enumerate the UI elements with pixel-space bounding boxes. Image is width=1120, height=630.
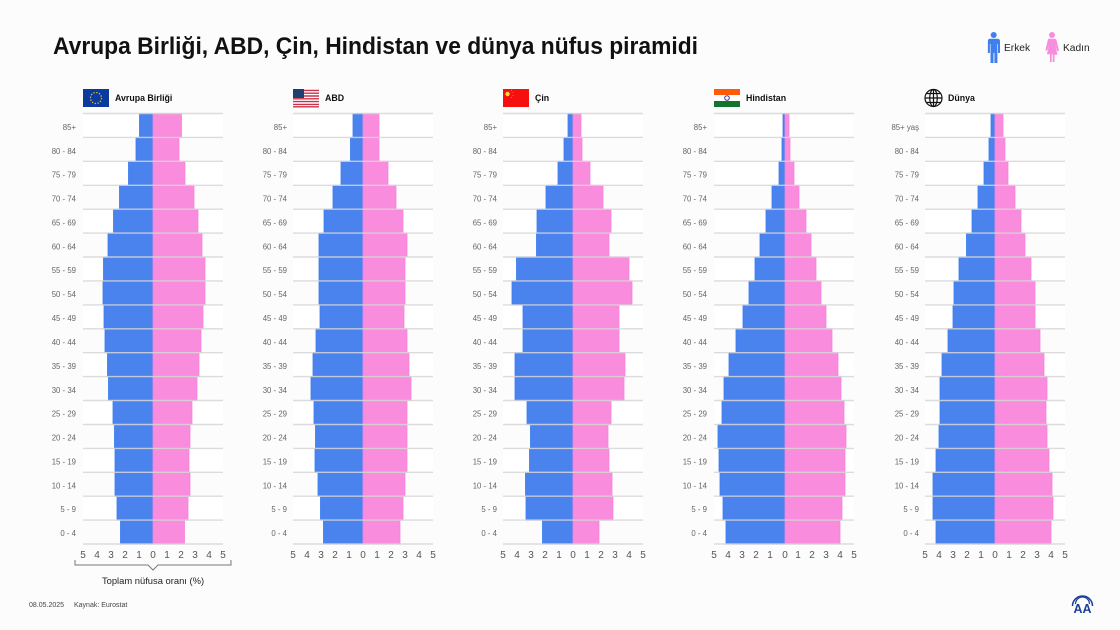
icon: EU flag bbox=[83, 89, 109, 107]
x axis ticks: 1 bbox=[346, 550, 352, 561]
x axis ticks bbox=[290, 550, 436, 561]
age labels: 15 - 19 bbox=[895, 458, 919, 466]
age labels: 0 - 4 bbox=[903, 529, 920, 538]
icon: man bbox=[988, 32, 1000, 63]
age labels: 30 - 34 bbox=[683, 386, 708, 395]
footer: date and source: Kaynak: Eurostat bbox=[74, 602, 127, 609]
row bands bbox=[293, 114, 433, 520]
age labels: 65 - 69 bbox=[263, 218, 287, 228]
female bars bbox=[573, 114, 632, 544]
age labels: 85+ yaş bbox=[891, 123, 919, 132]
age labels: 65 - 69 bbox=[473, 218, 497, 228]
icon: AA logo bbox=[1072, 596, 1092, 616]
age labels: 75 - 79 bbox=[473, 170, 497, 180]
age labels: 0 - 4 bbox=[271, 529, 288, 538]
x axis ticks: 4 bbox=[837, 550, 843, 561]
female bars bbox=[995, 114, 1053, 544]
age labels: 10 - 14 bbox=[52, 482, 77, 490]
age labels: 80 - 84 bbox=[52, 147, 77, 156]
age labels: 75 - 79 bbox=[263, 170, 287, 180]
icon: China flag bbox=[503, 89, 529, 107]
icon: US flag bbox=[293, 89, 319, 107]
age labels: 5 - 9 bbox=[60, 505, 76, 514]
x axis ticks: 2 bbox=[964, 550, 970, 561]
x axis ticks: 5 bbox=[500, 550, 506, 561]
x axis ticks: 2 bbox=[809, 550, 815, 561]
x axis ticks: 0 bbox=[150, 550, 156, 561]
x axis ticks: 4 bbox=[206, 550, 212, 561]
x axis ticks: 3 bbox=[528, 550, 534, 561]
age labels: 75 - 79 bbox=[52, 170, 76, 180]
age labels: 25 - 29 bbox=[473, 410, 497, 418]
x axis ticks: 2 bbox=[598, 550, 604, 561]
age labels: 35 - 39 bbox=[52, 362, 76, 371]
age labels: 70 - 74 bbox=[263, 194, 288, 204]
age labels: 10 - 14 bbox=[473, 482, 498, 490]
x axis ticks: 5 bbox=[430, 550, 436, 561]
x axis ticks: 5 bbox=[640, 550, 646, 561]
female bars bbox=[785, 114, 846, 544]
x axis ticks: 2 bbox=[1020, 550, 1026, 561]
heading: ABD bbox=[325, 93, 344, 103]
age labels bbox=[891, 123, 920, 538]
icon: woman bbox=[1045, 32, 1059, 62]
footer: date and source: 08.05.2025 bbox=[29, 602, 64, 609]
male bars bbox=[311, 114, 363, 544]
male bars bbox=[512, 114, 573, 544]
x axis ticks: 5 bbox=[290, 550, 296, 561]
x axis ticks: 1 bbox=[767, 550, 773, 561]
age labels: 50 - 54 bbox=[683, 290, 708, 299]
age labels: 75 - 79 bbox=[895, 170, 919, 180]
x axis ticks: 0 bbox=[782, 550, 788, 561]
legend bbox=[988, 32, 1090, 63]
age labels: 85+ bbox=[274, 123, 287, 132]
age labels: 65 - 69 bbox=[895, 218, 919, 228]
x axis ticks: 3 bbox=[950, 550, 956, 561]
x axis ticks: 1 bbox=[978, 550, 984, 561]
x axis ticks: 0 bbox=[360, 550, 366, 561]
age labels: 35 - 39 bbox=[895, 362, 919, 371]
age labels: 15 - 19 bbox=[683, 458, 707, 466]
age labels: 35 - 39 bbox=[263, 362, 287, 371]
x axis ticks: 1 bbox=[164, 550, 170, 561]
x axis ticks: 2 bbox=[542, 550, 548, 561]
heading: Avrupa Birliği bbox=[115, 93, 172, 103]
age labels: 65 - 69 bbox=[683, 218, 707, 228]
age labels: 45 - 49 bbox=[473, 314, 497, 323]
x axis ticks: 2 bbox=[753, 550, 759, 561]
age labels: 20 - 24 bbox=[263, 434, 288, 442]
x axis ticks: 2 bbox=[178, 550, 184, 561]
age labels: 5 - 9 bbox=[691, 505, 707, 514]
age labels: 20 - 24 bbox=[895, 434, 920, 442]
age labels: 55 - 59 bbox=[52, 266, 76, 275]
x axis ticks: 4 bbox=[936, 550, 942, 561]
age labels: 55 - 59 bbox=[683, 266, 707, 275]
panel: Çin bbox=[473, 89, 646, 561]
panel: Avrupa Birliği bbox=[52, 89, 231, 586]
age labels: 50 - 54 bbox=[263, 290, 288, 299]
row bands bbox=[503, 114, 643, 520]
age labels bbox=[683, 123, 708, 538]
footer: date and source bbox=[29, 602, 127, 609]
panel: ABD bbox=[263, 89, 436, 561]
heading: Çin bbox=[535, 93, 549, 103]
age labels: 60 - 64 bbox=[473, 242, 498, 252]
x axis ticks: 4 bbox=[304, 550, 310, 561]
x axis ticks: 5 bbox=[922, 550, 928, 561]
age labels: 0 - 4 bbox=[691, 529, 708, 538]
male bars bbox=[103, 114, 153, 544]
axis title: Toplam nüfusa oranı (%) bbox=[102, 575, 204, 586]
age labels: 45 - 49 bbox=[683, 314, 707, 323]
age labels: 10 - 14 bbox=[895, 482, 920, 490]
age labels: 70 - 74 bbox=[52, 194, 77, 204]
age labels: 25 - 29 bbox=[263, 410, 287, 418]
age labels: 20 - 24 bbox=[683, 434, 708, 442]
age labels bbox=[52, 123, 77, 538]
age labels: 60 - 64 bbox=[263, 242, 288, 252]
age labels: 0 - 4 bbox=[60, 529, 77, 538]
x axis ticks: 5 bbox=[1062, 550, 1068, 561]
x axis ticks: 1 bbox=[584, 550, 590, 561]
x axis ticks bbox=[922, 550, 1068, 561]
x axis ticks: 3 bbox=[1034, 550, 1040, 561]
age labels: 45 - 49 bbox=[263, 314, 287, 323]
age labels: 15 - 19 bbox=[473, 458, 497, 466]
icon: India flag bbox=[714, 89, 740, 107]
age labels: 30 - 34 bbox=[263, 386, 288, 395]
x axis ticks: 3 bbox=[108, 550, 114, 561]
age labels: 50 - 54 bbox=[895, 290, 920, 299]
age labels: 85+ bbox=[63, 123, 76, 132]
panel: Hindistan bbox=[683, 89, 857, 561]
age labels: 25 - 29 bbox=[895, 410, 919, 418]
icon: globe bbox=[925, 90, 942, 106]
x axis ticks: 3 bbox=[402, 550, 408, 561]
row bands bbox=[714, 114, 854, 520]
x axis ticks: 5 bbox=[711, 550, 717, 561]
x axis ticks: 0 bbox=[570, 550, 576, 561]
axis bracket bbox=[75, 560, 231, 570]
x axis ticks: 5 bbox=[80, 550, 86, 561]
panel: Dünya bbox=[891, 90, 1068, 561]
x axis ticks bbox=[500, 550, 646, 561]
age labels: 10 - 14 bbox=[263, 482, 288, 490]
row bands bbox=[83, 114, 223, 520]
label: Erkek: Erkek bbox=[1004, 43, 1031, 54]
age labels: 70 - 74 bbox=[473, 194, 498, 204]
x axis ticks: 1 bbox=[556, 550, 562, 561]
age labels bbox=[473, 123, 498, 538]
x axis ticks: 4 bbox=[725, 550, 731, 561]
age labels: 65 - 69 bbox=[52, 218, 76, 228]
age labels: 10 - 14 bbox=[683, 482, 708, 490]
age labels: 15 - 19 bbox=[52, 458, 76, 466]
x axis ticks: 1 bbox=[1006, 550, 1012, 561]
age labels: 35 - 39 bbox=[473, 362, 497, 371]
x axis ticks: 2 bbox=[122, 550, 128, 561]
age labels: 75 - 79 bbox=[683, 170, 707, 180]
age labels: 50 - 54 bbox=[473, 290, 498, 299]
age labels: 40 - 44 bbox=[52, 338, 77, 347]
age labels: 60 - 64 bbox=[52, 242, 77, 252]
x axis ticks: 5 bbox=[851, 550, 857, 561]
x axis ticks bbox=[80, 550, 226, 561]
age labels: 15 - 19 bbox=[263, 458, 287, 466]
male bars bbox=[718, 114, 785, 544]
age labels: 55 - 59 bbox=[263, 266, 287, 275]
heading: Hindistan bbox=[746, 93, 786, 103]
x axis ticks: 0 bbox=[992, 550, 998, 561]
age labels: 50 - 54 bbox=[52, 290, 77, 299]
age labels: 25 - 29 bbox=[683, 410, 707, 418]
age labels: 80 - 84 bbox=[263, 147, 288, 156]
female bars bbox=[363, 114, 411, 544]
age labels: 70 - 74 bbox=[683, 194, 708, 204]
icon: AA logo: AA bbox=[1074, 602, 1092, 616]
age labels bbox=[263, 123, 288, 538]
x axis ticks: 4 bbox=[514, 550, 520, 561]
age labels: 40 - 44 bbox=[895, 338, 920, 347]
age labels: 80 - 84 bbox=[895, 147, 920, 156]
title: Avrupa Birliği, ABD, Çin, Hindistan ve dünya nüfus piramidi bbox=[53, 33, 698, 60]
row bands bbox=[925, 114, 1065, 520]
x axis ticks: 3 bbox=[318, 550, 324, 561]
age labels: 70 - 74 bbox=[895, 194, 920, 204]
x axis ticks: 3 bbox=[823, 550, 829, 561]
age labels: 45 - 49 bbox=[52, 314, 76, 323]
age labels: 45 - 49 bbox=[895, 314, 919, 323]
x axis ticks: 4 bbox=[1048, 550, 1054, 561]
age labels: 5 - 9 bbox=[481, 505, 497, 514]
x axis ticks: 5 bbox=[220, 550, 226, 561]
age labels: 30 - 34 bbox=[895, 386, 920, 395]
age labels: 40 - 44 bbox=[473, 338, 498, 347]
age labels: 40 - 44 bbox=[683, 338, 708, 347]
x axis ticks: 4 bbox=[626, 550, 632, 561]
age labels: 55 - 59 bbox=[895, 266, 919, 275]
x axis ticks: 1 bbox=[136, 550, 142, 561]
x axis ticks: 3 bbox=[739, 550, 745, 561]
age labels: 20 - 24 bbox=[52, 434, 77, 442]
x axis ticks: 2 bbox=[332, 550, 338, 561]
age labels: 30 - 34 bbox=[52, 386, 77, 395]
age labels: 60 - 64 bbox=[895, 242, 920, 252]
x axis ticks: 3 bbox=[612, 550, 618, 561]
x axis ticks: 1 bbox=[795, 550, 801, 561]
heading: Dünya bbox=[948, 93, 975, 103]
age labels: 80 - 84 bbox=[683, 147, 708, 156]
age labels: 80 - 84 bbox=[473, 147, 498, 156]
age labels: 0 - 4 bbox=[481, 529, 498, 538]
age labels: 5 - 9 bbox=[271, 505, 287, 514]
x axis ticks bbox=[711, 550, 857, 561]
x axis ticks: 4 bbox=[416, 550, 422, 561]
x axis ticks: 4 bbox=[94, 550, 100, 561]
age labels: 20 - 24 bbox=[473, 434, 498, 442]
x axis ticks: 3 bbox=[192, 550, 198, 561]
male bars bbox=[933, 114, 995, 544]
age labels: 35 - 39 bbox=[683, 362, 707, 371]
age labels: 55 - 59 bbox=[473, 266, 497, 275]
age labels: 85+ bbox=[694, 123, 707, 132]
age labels: 25 - 29 bbox=[52, 410, 76, 418]
x axis ticks: 1 bbox=[374, 550, 380, 561]
age labels: 40 - 44 bbox=[263, 338, 288, 347]
female bars bbox=[153, 114, 205, 544]
label: Kadın: Kadın bbox=[1063, 43, 1090, 54]
age labels: 60 - 64 bbox=[683, 242, 708, 252]
age labels: 5 - 9 bbox=[903, 505, 919, 514]
age labels: 30 - 34 bbox=[473, 386, 498, 395]
x axis ticks: 2 bbox=[388, 550, 394, 561]
age labels: 85+ bbox=[484, 123, 497, 132]
